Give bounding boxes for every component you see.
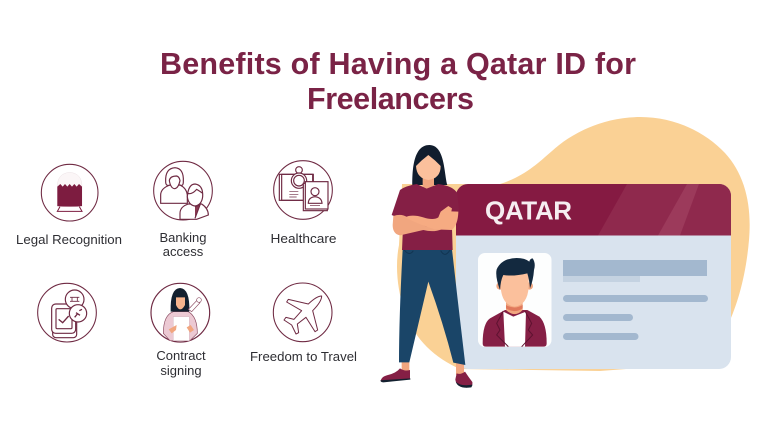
hair [412,145,447,185]
icon: airplane [273,283,332,342]
benefit: Contract signing [151,283,210,378]
shoes [381,368,410,381]
icon: ID documents [274,161,332,219]
benefit: Banking access: access [163,244,204,259]
label: Contract [156,348,206,363]
benefit: Healthcare [270,161,336,246]
photo frame [478,253,552,347]
header sheen [598,184,731,236]
title: Benefits of Having a Qatar ID for [160,47,636,81]
benefit: Freedom to Travel [250,283,357,364]
ID card [456,184,731,369]
title: Freelancers [307,82,474,116]
benefit: unlabelled device [38,283,96,342]
label: Legal Recognition [16,232,122,247]
ankles [402,360,464,375]
benefit: Contract signing: signing [160,363,202,378]
benefit: Legal Recognition [16,164,122,247]
card body [456,184,731,369]
title [160,47,636,116]
icon: Qatar emblem [41,164,98,221]
icon: tablet with check [38,283,96,342]
portrait [483,258,547,347]
woman figure [380,145,473,388]
crossed arms [393,215,442,235]
label: Freedom to Travel [250,349,357,364]
icon: two people [154,161,212,220]
label: Healthcare [270,231,336,246]
neck and face [423,173,434,189]
card header [456,184,731,236]
background blob [397,117,750,371]
icon: woman with document [151,283,210,342]
benefit: Banking access [154,161,212,259]
detail bars [563,260,707,276]
label: Banking [160,230,206,245]
shirt [392,184,459,250]
trousers [399,249,465,365]
card title: QATAR [485,196,572,226]
